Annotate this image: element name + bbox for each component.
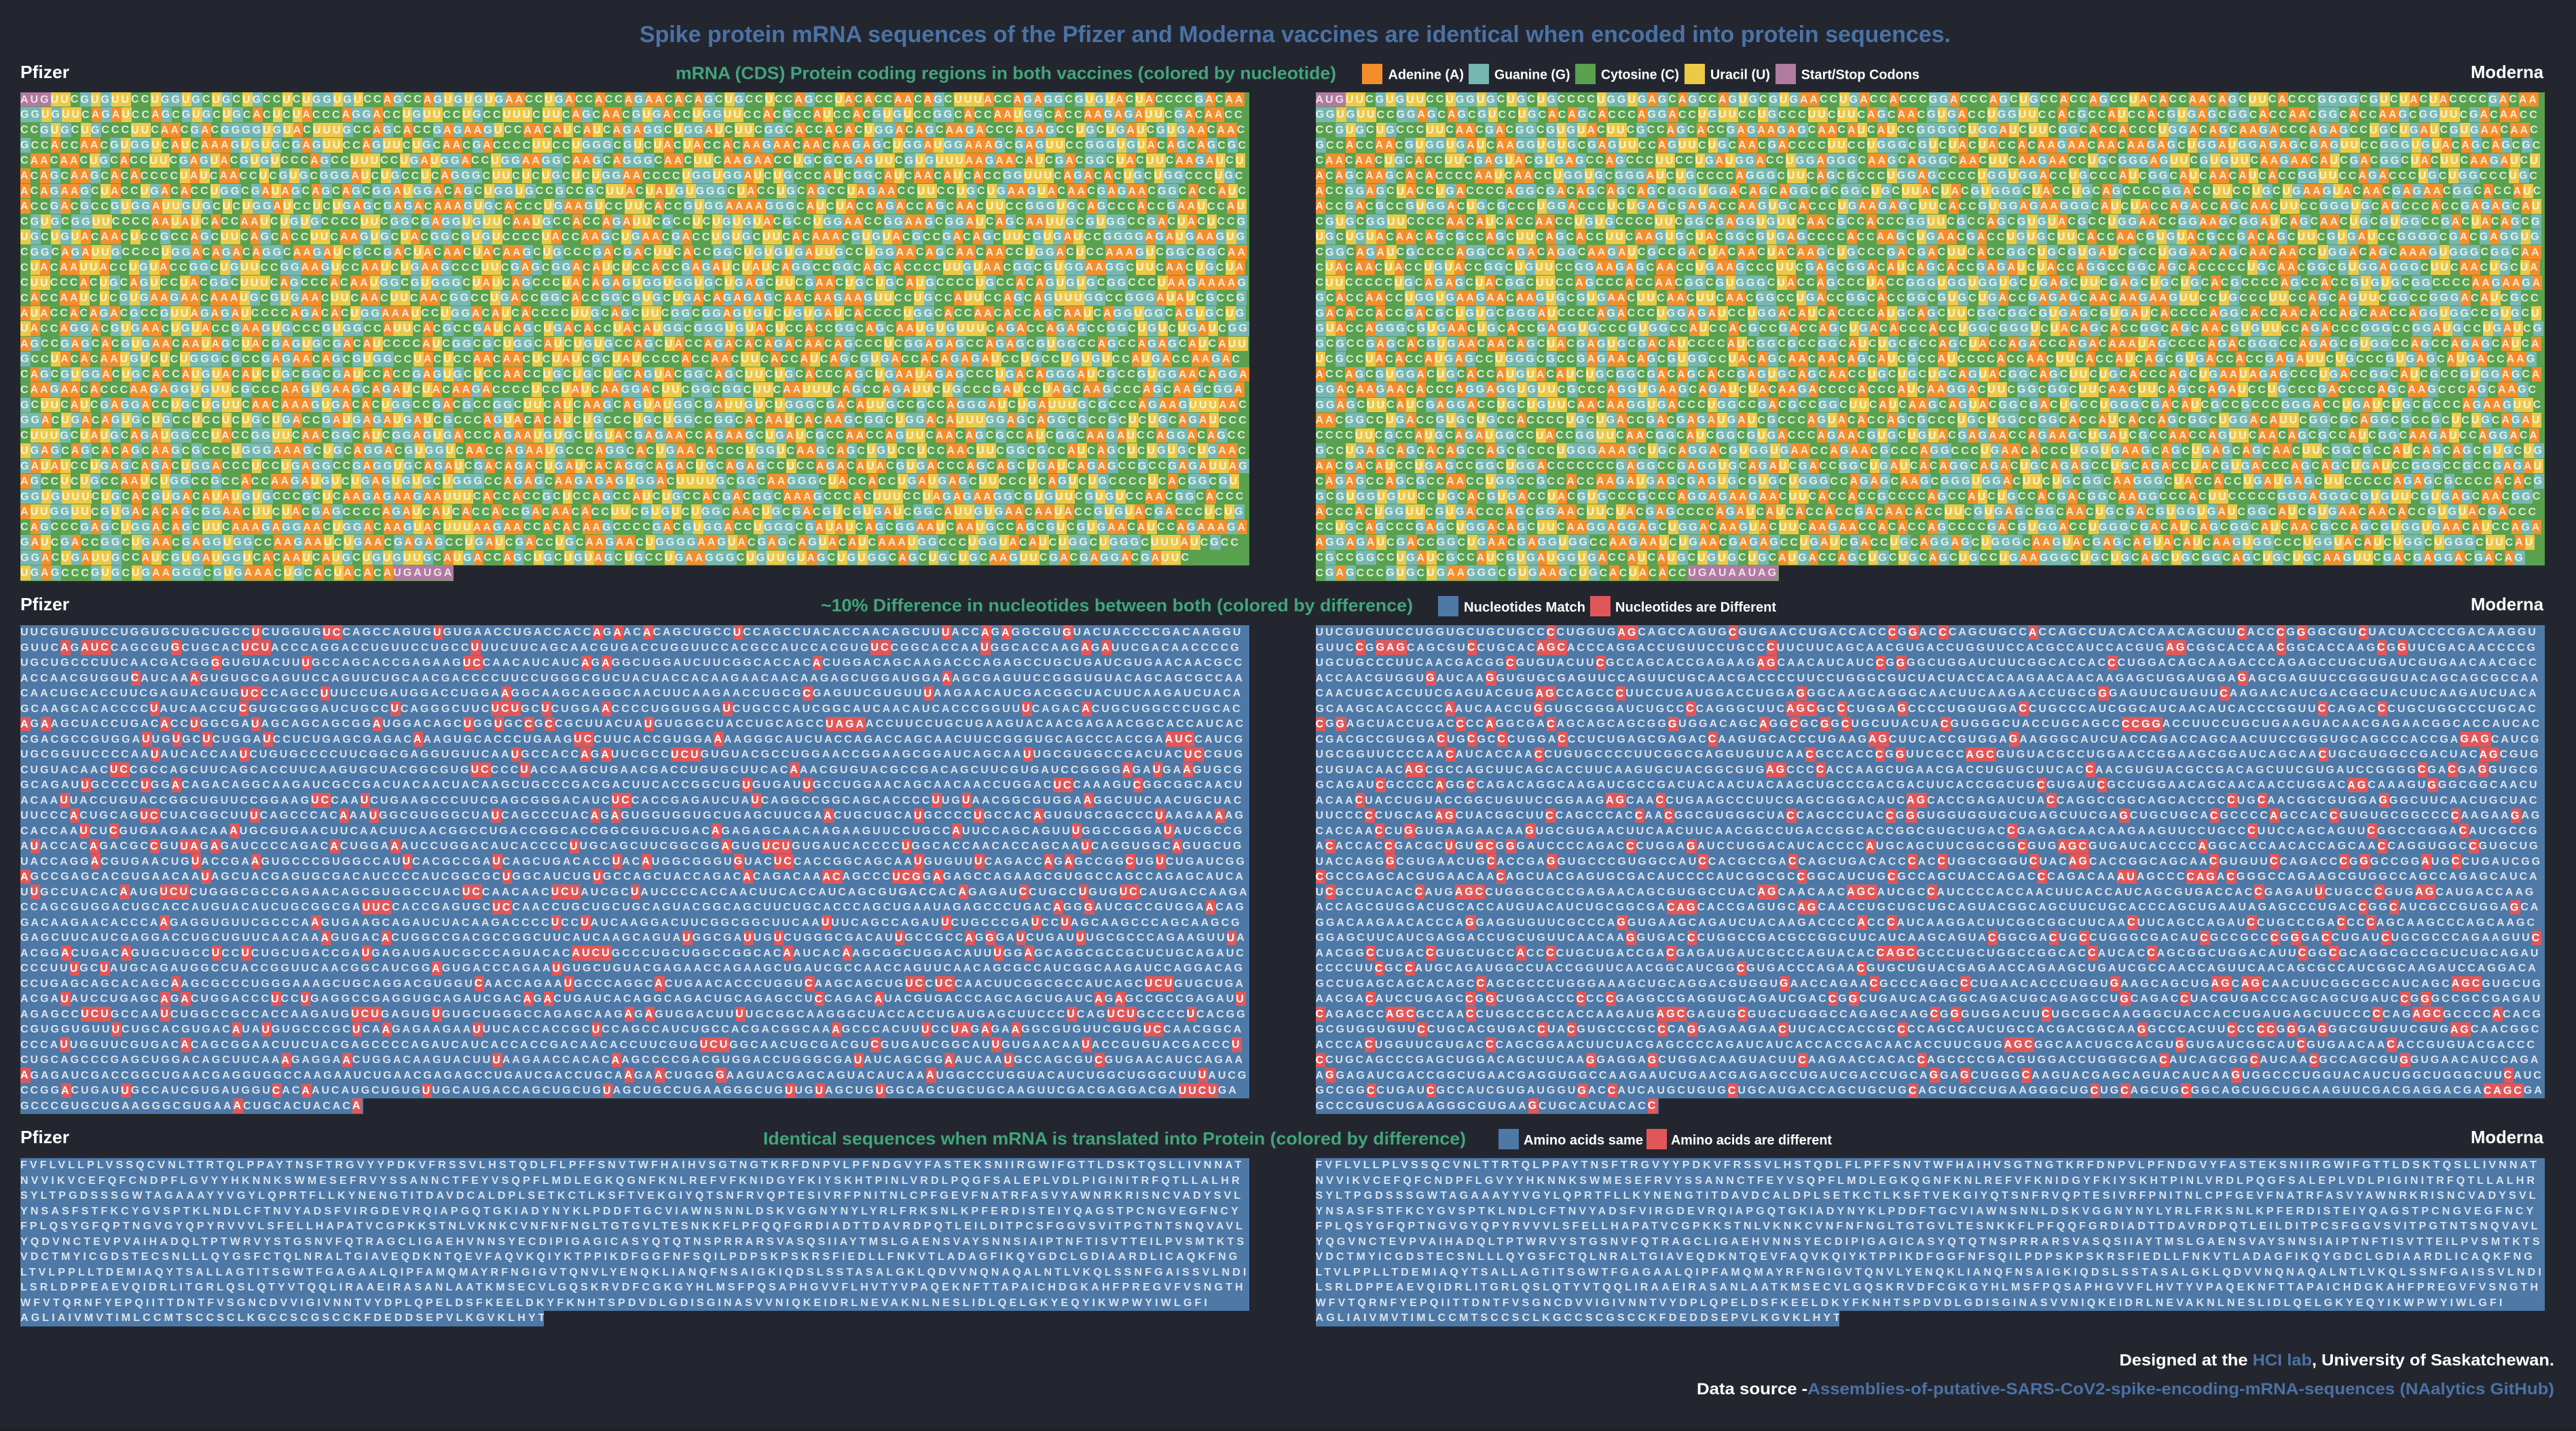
heading: nucleotide difference: ~10% Difference in nucleotides between both (colored by difference) xyxy=(821,595,1413,615)
legend: nucleotide match xyxy=(1438,596,1776,616)
panel: Pfizer protein sequence: FVFLVLLPLVSSQCVNLTTRTQLPPAYTNSFTRGVYYPDKVFRSSVLHSTQDLFLPFFSNVTWFHAIHVSGTNGTKRFDNPVLPFNDGVYFASTEKSNIIRGWIFGTTLDSKTQSLLIVNNATNVVIKVCEFQFCNDPFLGVYYHKNNKSWMESEFRVYSSANNCTFEYVSQPFLMDLEGKQGNFKNLREFVFKNIDGYFKIYSKHTPINLVRDLPQGFSALEPLVDLPIGINITRFQTLLALHRSYLTPGDSSSGWTAGAAAYYVGYLQPRTFLLKYNENGTITDAVDCALDPLSETKCTLKSFTVEKGIYQTSNFRVQPTESIVRFPNITNLCPFGEVFNATRFASVYAWNRKRISNCVADYSVLYNSASFSTFKCYGVSPTKLNDLCFTNVYADSFVIRGDEVRQIAPGQTGKIADYNYKLPDDFTGCVIAWNSNNLDSKVGGNYNYLYRLFRKSNLKPFERDISTEIYQAGSTPCNGVEGFNCYFPLQSYGFQPTNGVGYQPYRVVVLSFELLHAPATVCGPKKSTNLVKNKCVNFNFNGLTGTGVLTESNKKFLPFQQFGRDIADTTDAVRDPQTLEILDITPCSFGGVSVITPGTNTSNQVAVLYQDVNCTEVPVAIHADQLTPTWRVYSTGSNVFQTRAGCLIGAEHVNNSYECDIPIGAGICASYQTQTNSPRRARSVASQSIIAYTMSLGAENSVAYSNNSIAIPTNFTISVTTEILPVSMTKTSVDCTMYICGDSTECSNLLLQYGSFCTQLNRALTGIAVEQDKNTQEVFAQVKQIYKTPPIKDFGGFNFSQILPDPSKPSKRSFIEDLLFNKVTLADAGFIKQYGDCLGDIAARDLICAQKFNGLTVLPPLLTDEMIAQYTSALLAGTITSGWTFGAGAALQIPFAMQMAYRFNGIGVTQNVLYENQKLIANQFNSAIGKIQDSLSSTASALGKLQDVVNQNAQALNTLVKQLSSNFGAISSVLNDILSRLDPPEAEVQIDRLITGRLQSLQTYVTQQLIRAAEIRASANLAATKMSECVLGQSKRVDFCGKGYHLMSFPQSAPHGVVFLHVTYVPAQEKNFTTAPAICHDGKAHFPREGVFVSNGTHWFVTQRNFYEPQIITTDNTFVSGNCDVVIGIVNNTVYDPLQPELDSFKEELDKYFKNHTSPDVDLGDISGINASVVNIQKEIDRLNEVAKNLNESLIDLQELGKYEQYIKWPWYIWLGFI xyxy=(20,1159,1249,1309)
legend: nucleotides: Guanine (G) xyxy=(1494,68,1570,83)
label: Pfizer row 2: Pfizer xyxy=(20,594,69,614)
panel: Pfizer protein sequence: AGLIAIVMVTIMLCCMTSCCSCLKGCCSCGSCCKFDEDDSEPVLKGVKLHYT xyxy=(20,1312,548,1324)
panel: Moderna mRNA coloured by nucleotide: CGAGCCCGUGCUGAAGGGCGUGAAGCUGCACUACACCUGAUAAUAG xyxy=(1316,568,1778,578)
legend: nucleotides xyxy=(1362,64,1919,84)
label: Moderna row 3: Moderna xyxy=(2471,1127,2544,1147)
legend: nucleotides: Adenine (A) xyxy=(1388,68,1464,83)
legend: nucleotides: Start/Stop Codons xyxy=(1801,68,1919,83)
panel: Moderna mRNA coloured by nucleotide: AUGUUCGUGUUCCUGGUGCUGCUGCCCCUGGUGAGCAGCCAGUGCGUGAACCUGACCACCCGGACCCAGCUGCCACCAGCCUACACCAACAGCUUCACCCGGGGCGUCUACUACCCCGACAA GGUGUUCCGGAGCAGCGUCCUGCACAGCACCCAGGACCUGUUCCUGCCCUUCUUCAGCAACGUGACCUGGUUCCACGCCAUCCACGUGAGCGGCACCAACGGCACCAAGCGGUUCGACAACCCCGUGCUGCCCUUCAACGACGGCGUGUACUUCGCCAGCACCGAGAAGAGCAACAUCAUCCGGGGCUGGAUCUUCGGCACCACCCUGGACAGCAAGACCCAGAGCCUGCUGAUCGUGAACAAC GCCACCAACGUGGUGAUCAAGGUGUGCGAGUUCCAGUUCUGCAACGACCCCUUCCUGGGCGUCUACUACCACAAGAACAACAAGAGCUGGAUGGAGAGCGAGUUCCGGGUGUACAGCAGCGCCAACAACUGCACCUUCGAGUACGUGAGCCAGCCCUUCCUGAUGGACCUGGAGGGCAAGCAGGGCAACUUCAAGAACCUGCGGGAGUUCGUGUUCAAGAACAUCGACGGCUACUUCAAGAUCU ACAGCAAGCACACCCCAAUCAACCUGGUGCGGGAUCUGCCCCAGGGCUUCAGCGCCCUGGAGCCCCUGGUGGACCUGCCCAUCGGCAUCAACAUCACCGGUUCCAGACCCUGCUGGCCCUGC ACCGGAGCUACCUGACCCCAGGCGACAGCAGCAGCGGGUGGACAGCAGGCGCGGCUGCUUACUACGUGGGCUACCUGCAGCCCCGGACCUUCCUGCUGAAGUACAACGAGAACGGCACCAUC ACCGACGCCGUGGACUGCGCCCUGGACCCUCUGAGCGAGACCAAGUGCACCCUGAAGAGCUUCACCGUGGAGAAGGGCAUCUACCAGACCAGCAACUUCCGGGUGCAGCCCACCGAGAGCAU CGUGCGGUUCCCCAACAUCACCAACCUGUGCCCCUUCGGCGAGGUGUUCAACGCCACCCGGUUCGCCAGCGUGUACGCCUGGAACCGGAAGCGGAUCAGCAACUGCGUGGCCGACUACAGCG UGCUGUACAACAGCGCCAGCUUCAGCACCUUCAAGUGCUACGGCGUGAGCCCCACCAAGCUGAACGACCUGUGCUUCACCAACGUGUACGCCGACAGCUUCGUGAUCCGGGGCGACGAGGUG CGGCAGAUCGCCCCAGGCCAGACAGGCAAGAUCGCCGACUACAACUACAAGCUGCCCGACGACUUCACCGGCUGCGUGAUCGCCUGGAACAGCAACAACCUGGACAGCAAAGUGGGCGGCAA CUACAACUACCUGUACCGGCUGUUCCGGAAGAGCAACCUGAAGCCCUUCGAGCGGACAUCAGCACCGAGAUCUACCAGGCCGGCAGCACCCCCUGCAACGGCGUGGAGGGCUUCAACUGCUA CUUCCCCCUGCAGAGCUACGGCUUCCAGCCCACCAACGGCGUGGGCUACCAGCCCUACCGGGUGGUGGUGCUGAGCUUCGAGCUGCUGCACGCCCCAGCCACCGUGUGCGGCCCCAAGAAGA GCACCAACCUGGUGAAGAACAAGUGCGUGAACUUCAACUUCAACGGCCUGACCGGCACCGGCGUGCUGACCGAGAGCAACAAGAAGUUCCUGCCCUUCCAGCAGUUCGGCCGGGACAUCGCC GACACCACCGACGCUGUGCGGGAUCCCCAGACCCUGGAGAUCCUGGACAUCACCCCAUGCAGCUUCGGCGGCGUGAGCGUGAUCACCCCAGGCACCAACACCAGCAACCAGGUGGCCGUGCU GUACCAGGGCGUGAACUGCACCGAGGUGCCCGUGGCCAUCCACGCCGACCAGCUGACACCCACCUGGCGGGUCUACAGCACCGGCAGCAACGUGUUCCAGACCCGGGCCGGAUGCCUGAUCGGCGCCGAGCACGUGAACAACAGCUACGAGUGCGACAUCCCCAUCGGCGCCGGCAUCUGCGCCAGCUACCAGACCCAGACAAAUAGCCCCAGACGGGCCAGAGCGUGGCCAGCCAGAGCAUCA UCGCCUACACCAUGAGCCUGGGCGCCGAGAACAGCGUGGCCUACAGCAACAACAGCAUCGCCAUCCCCACCAACUUCACCAUCAGCGUGACCACCGAGAUUCUGCCCGUGAGCAUGACCAAG ACCAGCGUGGACUGCACCAUGUACAUCUGCGGCGACAGCACCGAGUGCAGCAACCUGCUGCUGCAGUACGGCAGCUUCUGCACCCAGCUGAAUAGAGCCCUGACCGGCAUCGCCGUGGAGCA GGACAAGAACACCCAGGAGGUGUUCGCCCAGGUGAAGCAGAUCUACAAGACCCCACCCAUCAAGGACUUCGGCGGCUUCAACUUCAGCCAGAUCCUGCCCGACCCCAGCAAGCCCAGCAAGC GGAGCUUCAUCGAGGACCUGCUGUUCAACAAGGUGACCCUGGCCGACGCCGGCUUCAUCAAGCAGUACGGCGACUGCCUGGGCGACAUCGCCGCCCGGGACCUGAUCUGCGCCCAGAAGUUC AACGGCCUGACCGUGCUGCCACCCCUGCUGACCGACGAGAUGAUCGCCCAGUACACCAGCGCCCUGCUGGCCGGCACCAUCACCAGCGGCUGGACAUUCGGCGCAGGCGCCGCUCUGCAGAU CCCCUUCGCCAUGCAGAUGGCCUACCGGUUCAACGGCAUCGGCGUGACCCAGAACGUGCUGUACGAGAACCAGAAGCUGAUCGCCAACCAGUUCAACAGCGCCAUCGGCAAGAUCCAGGACA GCCUGAGCAGCACAGCCAGCGCCCUGGGAAAGCUGCAGGACGUGGUGAACCAGAACGCCCAGGCCCUGAACACCCUGGUGAAGCAGCUGAGCAGCAACUUCGGCGCCAUCAGCAGCGUGCUG AACGACAUCCUGAGCCGGCUGGACCCCCCCGAGGCCGAGGUGCAGAUCGACCGGCUGAUCACAGGCAGACUGCAGAGCCUGCAGACCUACGUGACCCAGCAGCUGAUCCGGGCCGCCGAGAU CAGAGCCAGCGCCAACCUGGCCGCCACCAAGAUGAGCGAGUGCGUGCUGGGCCAGAGCAAGCGGGUGGACUUCUGCGGCAAGGGCUACCACCUGAUGAGCUUCCCCCAGAGCGCCCCACACGGCGUGGUGUUCCUGCACGUGACCUACGUGCCCGCCCAGGAGAAGAACUUCACCACCGCCCCAGCCAUCUGCCACGACGGCAAGGCCCACUUCCCCCGGGAGGGCGUGUUCGUGAGCAACGGC ACCCACUGGUUCGUGACCCAGCGGAACUUCUACGAGCCCCAGAUCAUCACCACCGACAACACCUUCGUGAGCGGCAACUGCGACGUGGUGAUCGGCAUCGUGAACAACACCGUGUACGACCCCCUGCAGCCCGAGCUGGACAGCUUCAAGGAGGAGCUGGACAAGUACUUCAAGAACCACACCAGCCCCGACGUGGACCUGGGCGACAUCAGCGGCAUCAACGCCAGCGUGGUGAACAUCCAGAAGGAGAUCGACCGGCUGAACGAGGUGGCCAAGAAUCUGAACGAGAGCCUGAUCGACCUGCAGGAGCUGGGCAAGUACGAGCAGUACAUCAAGUGGCCCUGGUACAUCUGGCUGGGCUUCAU CGCCGGCCUGAUCGCCAUCGUGAUGGUGACCAUCAUGCUGUGCUGCAUGACCAGCUGCUGCAGCUGCCUGAAGGGCUGCUGCAGCUGCGGCAGCUGCUGCAAGUUCGACGAGGACGACAG xyxy=(1316,94,2544,563)
legend: nucleotide match: Nucleotides are Different xyxy=(1615,600,1776,615)
label: Pfizer row 1: Pfizer xyxy=(20,62,69,82)
heading: protein translation: Identical sequences when mRNA is translated into Protein (colored by difference) xyxy=(763,1128,1466,1149)
panel: Pfizer mRNA coloured by nucleotide: AUGUUCGUGUUCCUGGUGCUGCUGCCUCUGGUGUCCAGCCAGUGUGUGAACCUGACCACCAGAACACAGCUGCCUCCAGCCUACACCAACAGCUUUACCAGAGGCGUGUACUACCCCGACAA GGUGUUCAGAUCCAGCGUGCUGCACUCUACCCAGGACCUGUUCCUGCCUUUCUUCAGCAACGUGACCUGGUUCCACGCCAUCCACGUGUCCGGCACCAAUGGCACCAAGAGAUUCGACAACCCCGUGCUGCCCUUCAACGACGGGGUGUACUUUGCCAGCACCGAGAAGUCCAACAUCAUCAGAGGCUGGAUCUUCGGCACCACACUGGACAGCAAGACCCAGAGCCUGCUGAUCGUGAACAAC GCCACCAACGUGGUCAUCAAAGUGUGCGAGUUCCAGUUCUGCAACGACCCCUUCCUGGGCGUCUACUACCACAAGAACAACAAGAGCUGGAUGGAAAGCGAGUUCCGGGUGUACAGCAGCGCCAACAACUGCACCUUCGAGUACGUGUCCCAGCCUUUCCUGAUGGACCUGGAAGGCAAGCAGGGCAACUUCAAGAACCUGCGCGAGUUCGUGUUUAAGAACAUCGACGGCUACUUCAAGAUCU ACAGCAAGCACACCCCUAUCAACCUCGUGCGGGAUCUGCCUCAGGGCUUCUCUGCUCUGGAACCCCUGGUGGAUCUGCCCAUCGGCAUCAACAUCACCGGUUUCAGACACUGCUGGCCCUGC ACAGAAGCUACCUGACACCUGGCGAUAGCAGCAGCGGAUGGACAGCUGGUGCCGCCGCUUACUAUGUGGGCUACCUGCAGCCUAGAACCUUCCUGCUGAAGUACAACGAGAACGGCACCAUC ACCGACGCCGUGGAUUGUGCUCUGGAUCCUCUGAGCGAGACAAAGUGCACCCUGAAGUCCUUCACCGUGGAAAAGGGCAUCUACCAGACCAGCAACUUCCGGGUGCAGCCCACCGAAUCCAU CGUGCGGUUCCCCAAUAUCACCAAUCUGUGCCCCUUCGGCGAGGUGUUCAAUGCCACCAGAUUCGCCUCUGUGUACGCCUGGAACCGGAAGCGGAUCAGCAAUUGCGUGGCCGACUACUCCG UGCUGUACAACUCCGCCAGCUUCAGCACCUUCAAGUGCUACGGCGUGUCCCCUACCAAGCUGAACGACCUGUGCUUCACAAACGUGUACGCCGACAGCUUCGUGAUCCGGGGAGAUGAAGUG CGGCAGAUUGCCCCUGGACAGACAGGCAAGAUCGCCGACUACAACUACAAGCUGCCCGACGACUUCACCGGCUGUGUGAUUGCCUGGAACAGCAACAACCUGGACUCCAAAGUCGGCGGCAA CUACAAUUACCUGUACCGGCUGUUCCGGAAGUCCAAUCUGAAGCCCUUCGAGCGGACAUCUCCACCGAGAUCUAUCAGGCCGGCAGCACCCCUUGUAACGGCGUGGAAGGCUUCAACUGCUA CUUCCCACUGCAGUCCUACGGCUUUCAGCCCACAAUGGCGUGGGCUAUCAGCCCUACAGAGUGGUGGUGCUGAGCUUCGAACUGCUGCAUGCCCCUGCCACAGUGUGCGGCCCUAAGAAAAG CACCAAUCUCGUGAAGAACAAAUGCGUGAACUUCAACUUCAACGGCCUGACCGGCACCGGCGUGCUGACAGAGAGCAACAAGAAGUUCCUGCCAUUCCAGCAGUUUGGCCGGGAUAUCGCCG AUACCACAGACGCCGUUAGAGAUCCCCAGACACUGGAAAUCCUGGACAUCACCCCUUGCAGCUUCGGCGGAGUGUCUGUGAUCACCCCUGGCACCAACACCAGCAAUCAGGUGGCAGUGCUG UACCAGGACGUGAACUGUACCGAAGUGCCCGUGGCCAUUCACGCCGAUCAGCUGACACCUACAUGGCGGGUGUACUCCACCGGCAGCAAUGUGUUUCAGACCAGAGCCGGCUGUCUGAUCGG AGCCGAGCACGUGAACAAUAGCUACGAGUGCGACAUCCCCAUCGGCGCUGGCAUCUGUGCCAGCUACCAGACACAGACAACAGCCCUCGGAGAGCCAGAGCGUGGCCAGCCAGAGCAUCAUU GCCUACACAAUGUCUCUGGGCGCCGAGAACAGCGUGGCCUACUCCAACAACUCUAUCGCUAUCCCCACCAACUUCACCAUCAGCGUGACCACAGAGAUCCUGCCUGUGUCCAUGACCAAGACCAGCGUGGACUGCACCAUGUACAUCUGCGGCGAUCCACCGAGUGCUCCAACCUGCUGCUGCAGUACGGCAGCUUCUGCACCCAGCUGAAUAGAGCCCUGACAGGGAUCGCCGUGGAACAGGA CAAGAACACCCAAGAGGUGUUCGCCCAAGUGAAGCAGAUCUACAAGACCCCUCCUAUCAAGGACUUCGGCGGCUUCAAUUUCAGCCAGAUUCUGCCCGAUCCUAGCAAGCCCAGCAAGCGGA GCUUCAUCGAGGACCUGCUGUUCAACAAAGUGACACUGGCCGACGCCGGCUUCAUCAAGCAGUAUGGCGAUUGUCUGGGCGACAUUGCCGCCAGGGAUCUGAUUUGCGCCCAGAAGUUUAAC GGACUGACAGUGCUGCCUCCUCUGCUGACCGAUGAGAUGAUCGCCCAGUACACAUCUGCCCUGCUGGCCGGCACAAUCACAAGCGGCUGGACAUUUGGAGCAGGCGCCGCUCUGCAGAUCCCCUUUGCUAUGCAGAUGGCCUACCGGUUCAACGGCAUCGGAGUGACCCAGAAUGUGCUGUACGAGAACCAGAAGCUGAUCGCCAACCAGUUCAACAGCGCCAUCGGCAAGAUCCAGGACAGCC UGAGCAGCACAGCAAGCGCCCUGGGAAAGCUGCAGGACGUGGUCAACCAGAAUGCCCAGGCACUGAACACCCUGGUCAAGCAGCUGUCCUCCAACUUCGGCGCCAUCAGCUCUGUGCUGAAC GAUAUCCUGAGCAGACUGGACCCUCCUGAGGCCGAGGUGCAGAUCGACAGACUGAUCACAGGCAGACUGCAGAGCCUCCAGACAUACGUGACCCAGCAGCUGAUCAGAGCCGCCGAGAUUAG AGCCUCUGCCAAUCUGGCCGCCACCAAGAUGUCUGAGUGUGCUGGGCCAGAGCAAGAGAGUGGACUUUUGCGGCAAGGGCUACCACCUGAUGAGCUUCCCUCAGUCUGCCCCUCACGGCGU GGUGUUUCUGCACGUGACAUAUGUGCCCGCUCAAGAGAAGAAUUUCACCACCGCUCCAGCCAUCUGCCACGACGGCAAAGCCCACUUUCCUAGAGAAGGCGUGUUCGUGUCCAACGGCACCC AUUGGUUCGUGACACAGCGGAACUUCUACGAGCCCCAGAUCAUCACCACCGACAACACCUUCGUGUCUGGCAACUGCGACGUCGUGAUCGGCAUUGUGAACAAUACCGUGUACGACCCUCUG CAGCCCGAGCUGGACAGCUUCAAAGAGGAACUGGACAAGUACUUUAAGAACCACACAAGCCCCGACGUGGACCUGGGCGAUAUCAGCGGAAUCAAUGCCAGCGUCGUGAACAUCCAGAAAGA GAUCGACCGGCUGAACGAGGUGGCCAAGAAUCUGAACGAGAGCCUGAUCGACCUGCAAGAACUGGGGAAGUACGAGCAGUACAUCAAAUGGCCCUGGUACAUCUGGCUGGGCUUUAUCGCC GGACUGAUUGCCAUCGUGAUGGUCACAAUCAUGCUGUGUUGCAUGACCAGCUGCUGUAGCUGCCUGAAGGGCUGUUGUAGCUGUGGCAGCUGCUGCAAGUUCGACGAGGACGAUUC xyxy=(20,94,1249,563)
legend: nucleotides: Uracil (U) xyxy=(1710,68,1770,83)
legend: amino acids: Amino acids are different xyxy=(1671,1133,1832,1148)
panel: Moderna protein sequence: AGLIAIVMVTIMLCCMTSCCSCLKGCCSCGSCCKFDEDDSEPVLKGVKLHYT xyxy=(1316,1312,1843,1324)
legend: amino acids xyxy=(1498,1129,1832,1149)
legend: amino acids: Amino acids same xyxy=(1524,1133,1643,1148)
label: Pfizer row 3: Pfizer xyxy=(20,1127,69,1147)
title: Spike protein mRNA sequences of the Pfizer and Moderna vaccines are identical when encoded into protein sequences. xyxy=(640,22,1951,48)
panel: Moderna nucleotide differences: GCCCGUGCUGAAGGGCGUGAAGCUGCACUACACC xyxy=(1316,1100,1657,1112)
footer: data source: Data source - Assemblies-of-putative-SARS-CoV2-spike-encoding-mRNA-sequences (NAalytics GitHub) xyxy=(1697,1380,2554,1398)
panel: Pfizer mRNA coloured by nucleotide: UGAGCCCGUGCUGAAGGGCGUGAAACUGCACUACACAUGAUGA xyxy=(20,568,454,578)
label: Moderna row 2: Moderna xyxy=(2471,594,2544,614)
heading: mRNA coding regions: mRNA (CDS) Protein coding regions in both vaccines (colored by nucleotide) xyxy=(676,62,1336,83)
label: Moderna row 1: Moderna xyxy=(2471,62,2544,82)
legend: nucleotides: Cytosine (C) xyxy=(1601,68,1679,83)
panel: Moderna nucleotide differences: UUCGUGUUCCUGGUGCUGCUGCCCCUGGUGAGCAGCCAGUGCGUGAACCUGACCACCCGGACCCAGCUGCCACCAGCCUACACCAACAGCUUCACCCGGGGCGUCUACUACCCCGACAAGGUGUUCCGGAGCAGCGUCCUGCACAGCACCCAGGACCUGUUCCUGCCCUUCUUCAGCAACGUGACCUGGUUCCACGCCAUCCACGUGAGCGGCACCAACGGCACCAAGCGGUUCGACAACCCCGUGCUGCCCUUCAACGACGGCGUGUACUUCGCCAGCACCGAGAAGAGCAACAUCAUCCGGGGCUGGAUCUUCGGCACCACCCUGGACAGCAAGACCCAGAGCCUGCUGAUCGUGAACAACGCCACCAACGUGGUGAUCAAGGUGUGCGAGUUCCAGUUCUGCAACGACCCCUUCCUGGGCGUCUACUACCACAAGAACAACAAGAGCUGGAUGGAGAGCGAGUUCCGGGUGUACAGCAGCGCCAACAACUGCACCUUCGAGUACGUGAGCCAGCCCUUCCUGAUGGACCUGGAGGGCAAGCAGGGCAACUUCAAGAACCUGCGGGAGUUCGUGUUCAAGAACAUCGACGGCUACUUCAAGAUCUACAGCAAGCACACCCCAAUCAACCUGGUGCGGGAUCUGCCCCAGGGCUUCAGCGCCCUGGAGCCCCUGGUGGACCUGCCCAUCGGCAUCAACAUCACCCGGUUCCAGACCCUGCUGGCCCUGCAC CGGAGCUACCUGACCCCAGGCGACAGCAGCAGCGGGUGGACAGCAGGCGCGGCUGCUUACUACGUGGGCUACCUGCAGCCCCGGACCUUCCUGCUGAAGUACAACGAGAACGGCACCAUCACCGACGCCGUGGACUGCGCCCUGGACCCUCUGAGCGAGACCAAGUGCACCCUGAAGAGCUUCACCGUGGAGAAGGGCAUCUACCAGACCAGCAACUUCCGGGUGCAGCCCACCGAGAGCAUCGUGCGGUUCCCCAACAUCACCAACCUGUGCCCCUUCGGCGAGGUGUUCAACGCCACCCGGUUCGCCAGCGUGUACGCCUGGAACCGGAAGCGGAUCAGCAACUGCGUGGCCGACUACAGCGUGCUGUACAACAGCGCCAGCUUCAGCACCUUCAAGUGCUACGGCGUGAGCCCCACCAAGCUGAACGACCUGUGCUUCACCAACGUGUACGCCGACAGCUUCGUGAUCCGGGGCGACGAGGUGCGGCAGAUCGCCCCAGGCCAGACAGGCAAGAUCGCCGACUACAACUACAAGCUGCCCGACGACUUCACCGGCUGCGUGAUCGCCUGGAACAGCAACAACCUGGACAGCAAAGUGGGCGGCAACUACAACUACCUGUACCGGCUGUUCCGGAAGAGCAACCUGAAGCCCUUCGAGCGGGACAUCAGCACCGAGAUCUACCAGGCCGGCAGCACCCCCUGCAACGGCGUGGAGGGCUUCAACUGCUACUUCCCCCUGCAGAGCUACGGCUUCCAGCCCACCAACGGCGUGGGCUACCAGCCCUACCGGGUGGUGGUGCUGAGCUUCGAGCUGCUGCACGCCCCAGCCACCGUGUGCGGCCCCAAGAAGAGCACCAACCUGGUGAAGAACAAGUGCGUGAACUUCAACUUCAACGGCCUGACCGGCACCGGCGUGCUGACCGAGAGCAACAAGAAGUUCCUGCCCUUCCAGCAGUUCGGCCGGGACAUCGCCGACACCACCGACGCUGUGCGGGAUCCCCAGACCCUGGAGAUCCUGGACAUCACCCCAUGCAGCUUCGGCGGCGUGAGCGUGAUCACCCCAGGCACCAACACCAGCAACCAGGUGGCCGUGCUGUACCAGGGCGUGAACUGCACCGAGGUGCCCGUGGCCAUCCACGCCGACCAGCUGACACCCACCUGGCGGGUCUACAGCACCGGCAGCAACGUGUUCCAGACCCGGGCCGGAUGCCUGAUCGG CGCCGAGCACGUGAACAACAGCUACGAGUGCGACAUCCCCAUCGGCGCCGGCAUCUGCGCCAGCUACCAGACCCAGACAAAUAGCCCCAGACGGGCCAGAAGCGUGGCCAGCCAGAGCAUCAUCGCCUACACCAUGAGCCUGGGCGCCGAGAACAGCGUGGCCUACAGCAACAACAGCAUCGCCAUCCCCACCAACUUCACCAUCAGCGUGACCACCGAGAUUCUGCCCGUGAGCAUGACCAAGACCAGCGUGGACUGCACCAUGUACAUCUGCGGCGACAGCACCGAGUGCAGCAACCUGCUGCUGCAGUACGGCAGCUUCUGCACCCAGCUGAAUAGAGCCCUGACCGGCAUCGCCGUGGAGCAGGACAAGAACACCCAGGAGGUGUUCGCCCAGGUGAAGCAGAUCUACAAGACCCCACCCAUCAAGGACUUCGGCGGCUUCAACUUCAGCCAGAUCCUGCCCGACCCCAGCAAGCCCAGCAAGCGGAGCUUCAUCGAGGACCUGCUGUUCAACAAGGUGACCCUGGCCGACGCCGGCUUCAUCAAGCAGUACGGCGACUGCCUGGGCGACAUCGCCGCCCGGGACCUGAUCUGCGCCCAGAAGUUC AACGGCCUGACCGUGCUGCCACCCCUGCUGACCGACGAGAUGAUCGCCCAGUACACCAGCGCCCUGCUGGCCGGCACCAUCACCAGCGGCUGGACAUUCGGCGCAGGCGCCGCUCUGCAGAUCCCCUUCGCCAUGCAGAUGGCCUACCGGUUCAACGGCAUCGGCGUGACCCAGAACGUGCUGUACGAGAACCAGAAGCUGAUCGCCAACCAGUUCAACAGCGCCAUCGGCAAGAUCCAGGACAGCCUGAGCAGCACAGCCAGCGCCCUGGGAAAGCUGCAGGACGUGGUGAACCAGAACGCCCAGGCCCUGAACACCCUGGUGAAGCAGCUGAGCAGCAACUUCGGCGCCAUCAGCAGCGUGCUGAACGACAUCCUGAGCCGGCUGGACCCCCCCGAGGCCGAGGUGCAGAUCGACCGGCUGAUCACAGGCAGACUGCAGAGCCUGCAGACCUACGUGACCCAGCAGCUGAUCCGGGCCGCCGAGAU CAGAGCCAGCGCCAACCUGGCCGCCACCAAGAUGAGCGAGUGCGUGCUGGGCCAGAGCAAGCGGGUGGACUUCUGCGGCAAGGGCUACCACCUGAUGAGCUUCCCCCAGAGCGCCCCACACGGCGUGGUGUUCCUGCACGUGACCUACGUGCCCGCCCAGGAGAAGAACUUCACCACCGCCCCAGCCAUCUGCCACGACGGCAAGGCCCACUUCCCCCGGGAGGGCGUGUUCGUGAGCAACGGCACCCACUGGUUCGUGACCCAGCGGAACUUCUACGAGCCCCAGAUCAUCACCACCGACAACACCUUCGUGAGCGGCAACUGCGACGUGGUGAUCGGCAUCGUGAACAACACCGUGUACGACCC CCUGCAGCCCGAGCUGGACAGCUUCAAGGAGGAGCUGGACAAGUACUUCAAGAACCACACCAGCCCCGACGUGGACCUGGGCGACAUCAGCGGCAUCAACGCCAGCGUGGUGAACAUCCAGAAGGAGAUCGACCGGCUGAACGAGGUGGCCAAGAAUCUGAACGAGAGCCUGAUCGACCUGCAGGAGCUGGGCAAGUACGAGCAGUACAUCAAGUGGCCCUGGUACAUCUGGCUGGGCUUCAUCGCCGGCCUGAUCGCCAUCGUGAUGGUGACCAUCAUGCUGUGCUGCAUGACCAGCUGCUGCAGCUGCCUGAAGGGCUGCUGCAGCUGCGGCAGCUGCUGCAAGUUCGACGAGGACGACAGCGA xyxy=(1316,627,2544,1096)
footer: credit: Designed at the HCI lab, University of Saskatchewan. xyxy=(2120,1352,2554,1370)
panel: Pfizer nucleotide differences: GCCCGUGCUGAAGGGCGUGAAACUGCACUACACA xyxy=(20,1100,362,1112)
panel: Moderna protein sequence: FVFLVLLPLVSSQCVNLTTRTQLPPAYTNSFTRGVYYPDKVFRSSVLHSTQDLFLPFFSNVTWFHAIHVSGTNGTKRFDNPVLPFNDGVYFASTEKSNIIRGWIFGTTLDSKTQSLLIVNNATNVVIKVCEFQFCNDPFLGVYYHKNNKSWMESEFRVYSSANNCTFEYVSQPFLMDLEGKQGNFKNLREFVFKNIDGYFKIYSKHTPINLVRDLPQGFSALEPLVDLPIGINITRFQTLLALHRSYLTPGDSSSGWTAGAAAYYVGYLQPRTFLLKYNENGTITDAVDCALDPLSETKCTLKSFTVEKGIYQTSNFRVQPTESIVRFPNITNLCPFGEVFNATRFASVYAWNRKRISNCVADYSVLYNSASFSTFKCYGVSPTKLNDLCFTNVYADSFVIRGDEVRQIAPGQTGKIADYNYKLPDDFTGCVIAWNSNNLDSKVGGNYNYLYRLFRKSNLKPFERDISTEIYQAGSTPCNGVEGFNCYFPLQSYGFQPTNGVGYQPYRVVVLSFELLHAPATVCGPKKSTNLVKNKCVNFNFNGLTGTGVLTESNKKFLPFQQFGRDIADTTDAVRDPQTLEILDITPCSFGGVSVITPGTNTSNQVAVLYQGVNCTEVPVAIHADQLTPTWRVYSTGSNVFQTRAGCLIGAEHVNNSYECDIPIGAGICASYQTQTNSPRRARSVASQSIIAYTMSLGAENSVAYSNNSIAIPTNFTISVTTEILPVSMTKTSVDCTMYICGDSTECSNLLLQYGSFCTQLNRALTGIAVEQDKNTQEVFAQVKQIYKTPPIKDFGGFNFSQILPDPSKPSKRSFIEDLLFNKVTLADAGFIKQYGDCLGDIAARDLICAQKFNGLTVLPPLLTDEMIAQYTSALLAGTITSGWTFGAGAALQIPFAMQMAYRFNGIGVTQNVLYENQKLIANQFNSAIGKIQDSLSSTASALGKLQDVVNQNAQALNTLVKQLSSNFGAISSVLNDILSRLDPPEAEVQIDRLITGRLQSLQTYVTQQLIRAAEIRASANLAATKMSECVLGQSKRVDFCGKGYHLMSFPQSAPHGVVFLHVTYVPAQEKNFTTAPAICHDGKAHFPREGVFVSNGTHWFVTQRNFYEPQIITTDNTFVSGNCDVVIGIVNNTVYDPLQPELDSFKEELDKYFKNHTSPDVDLGDISGINASVVNIQKEIDRLNEVAKNLNESLIDLQELGKYEQYIKWPWYIWLGFI xyxy=(1316,1159,2544,1309)
legend: nucleotide match: Nucleotides Match xyxy=(1464,600,1585,615)
panel: Pfizer nucleotide differences: UUCGUGUUCCUGGUGCUGCUGCCUCUGGUGUCCAGCCAGUGUGUGAACCUGACCACCAGAACACAGCUGCCUCCAGCCUACACCAACAGCUUUACCAGAGGCGUGUACUACCCCGACAAGGUGUUCAGAUCCAGCGUGCUGCACUCUACCCAGGACCUGUUCCUGCCUUUCUUCAGCAACGUGACCUGGUUCCACGCCAUCCACGUGUCCGGCACCAAUGGCACCAAGAGAUUCGACAACCCCGUGCUGCCCUUCAACGACGGGGUGUACUUUGCCAGCACCGAGAAGUCCAACAUCAUCAGAGGCUGGAUCUUCGGCACCACACUGGACAGCAAGACCCAGAGCCUGCUGAUCGUGAACAACGCCACCAACGUGGUCAUCAAAGUGUGCGAGUUCCAGUUCUGCAACGACCCCUUCCUGGGCGUCUACUACCACAAGAACAACAAGAGCUGGAUGGAAAGCGAGUUCCGGGUGUACAGCAGCGCCAACAACUGCACCUUCGAGUACGUGUCCCAGCCUUUCCUGAUGGACCUGGAAGGCAAGCAGGGCAACUUCAAGAACCUGCGCGAGUUCGUGUUUAAGAACAUCGACGGCUACUUCAAGAUCUACAGCAAGCACACCCCUAUCAACCUCGUGCGGGAUCUGCCUCAGGGCUUCUCUGCUCUGGAACCCCUGGUGGAUCUGCCCAUCGGCAUCAACAUCACCCGGUUUCAGACACUGCUGGCCCUGCAC AGAAGCUACCUGACACCUGGCGAUAGCAGCAGCGGAUGGACAGCUGGUGCCGCCGCUUACUAUGUGGGCUACCUGCAGCCUAGAACCUUCCUGCUGAAGUACAACGAGAACGGCACCAUCACCGACGCCGUGGAUUGUGCUCUGGAUCCUCUGAGCGAGACAAAGUGCACCCUGAAGUCCUUCACCGUGGAAAAGGGCAUCUACCAGACCAGCAACUUCCGGGUGCAGCCCACCGAAUCCAUCGUGCGGUUCCCCAAUAUCACCAAUCUGUGCCCCUUCGGCGAGGUGUUCAAUGCCACCAGAUUCGCCUCUGUGUACGCCUGGAACCGGAAGCGGAUCAGCAAUUGCGUGGCCGACUACUCCGUGCUGUACAACUCCGCCAGCUUCAGCACCUUCAAGUGCUACGGCGUGUCCCCUACCAAGCUGAACGACCUGUGCUUCACAAACGUGUACGCCGACAGCUUCGUGAUCCGGGGAGAUGAAGUGCGGCAGAUUGCCCCUGGACAGACAGGCAAGAUCGCCGACUACAACUACAAGCUGCCCGACGACUUCACCGGCUGUGUGAUUGCCUGGAACAGCAACAACCUGGACUCCAAAGUCGGCGGCAACUACAAUUACCUGUACCGGCUGUUCCGGAAGUCCAAUCUGAAGCCCUUCGAGCGGGACAUCUCCACCGAGAUCUAUCAGGCCGGCAGCACCCCUUGUAACGGCGUGGAAGGCUUCAACUGCUACUUCCCACUGCAGUCCUACGGCUUUCAGCCCACAAAUGGCGUGGGCUAUCAGCCCUACAGAGUGGUGGUGCUGAGCUUCGAACUGCUGCAUGCCCCUGCCACAGUGUGCGGCCCUAAGAAAAGCACCAAUCUCGUGAAGAACAAAUGCGUGAACUUCAACUUCAACGGCCUGACCGGCACCGGCGUGCUGACAGAGAGCAACAAGAAGUUCCUGCCAUUCCAGCAGUUUGGCCGGGAUAUCGCCGAUACCACAGACGCCGUUAGAGAUCCCCAGACACUGGAAAUCCUGGACAUCACCCCUUGCAGCUUCGGCGGAGUGUCUGUGAUCACCCCUGGCACCAACACCAGCAAUCAGGUGGCAGUGCUGUACCAGGACGUGAACUGUACCGAAGUGCCCGUGGCCAUUCACGCCGAUCAGCUGACACCUACAUGGCGGGUGUACUCCACCGGCAGCAAUGUGUUUCAGACCAGAGCCGGCUGUCUGAUCGG AGCCGAGCACGUGAACAAUAGCUACGAGUGCGACAUCCCCAUCGGCGCUGGCAUCUGUGCCAGCUACCAGACACAGACAAACAGCCCUCGGAGAGCCAGAAGCGUGGCCAGCCAGAGCAUCAUUGCCUACACAAUGUCUCUGGGCGCCGAGAACAGCGUGGCCUACUCCAACAACUCUAUCGCUAUCCCCACCAACUUCACCAUCAGCGUGACCACAGAGAUCCUGCCUGUGUCCAUGACCAAGACCAGCGUGGACUGCACCAUGUACAUCUGCGGCGAUUCCACCGAGUGCUCCAACCUGCUGCUGCAGUACGGCAGCUUCUGCACCCAGCUGAAUAGAGCCCUGACAGGGAUCGCCGUGGAACAGGACAAGAACACCCAAGAGGUGUUCGCCCAAGUGAAGCAGAUCUACAAGACCCCUCCUAUCAAGGACUUCGGCGGCUUCAAUUUCAGCCAGAUUCUGCCCGAUCCUAGCAAGCCCAGCAAGCGGAGCUUCAUCGAGGACCUGCUGUUCAACAAAGUGACACUGGCCGACGCCGGCUUCAUCAAGCAGUAUGGCGAUUGUCUGGGCGACAUUGCCGCCAGGGAUCUGAUUUGCGCCCAGAAGUUUAACGGACUGACAGUGCUGCCUCCUCUGCUGACCGAUGAGAUGAUCGCCCAGUACACAUCUGCCCUGCUGGCCGGCACAAUCACAAGCGGCUGGACAUUUGGAGCAGGCGCCGCUCUGCAGAUCCCCUUUGCUAUGCAGAUGGCCUACCGGUUCAACGGCAUCGGAGUGACCCAGAAUGUGCUGUACGAGAACCAGAAGCUGAUCGCCAACCAGUUCAACAGCGCCAUCGGCAAGAUCCAGGACAGCCUGAGCAGCACAGCAAGCGCCCUGGGAAAGCUGCAGGACGUGGUCAACCAGAAUGCCCAGGCACUGAACACCCUGGUCAAGCAGCUGUCCUCCAACUUCGGCGCCAUCAGCUCUGUGCUGAACGAUAUCCUGAGCAGACUGGACCCUCCUGAGGCCGAGGUGCAGAUCGACAGACUGAUCACAGGCAGACUGCAGAGCCUCCAGACAUACGUGACCCAGCAGCUGAUCAGAGCCGCCGAGAUU AGAGCCUCUGCCAAUCUGGCCGCCACCAAGAUGUCUGAGUGUGUGCUGGGCCAGAGCAAGAGAGUGGACUUUUGCGGCAAGGGCUACCACCUGAUGAGCUUCCCUCAGUCUGCCCCUCACGGCGUGGUGUUUCUGCACGUGACAUAUGUGCCCGCUCAAGAGAAGAAUUUCACCACCGCUCCAGCCAUCUGCCACGACGGCAAAGCCCACUUUCCUAGAGAAGGCGUGUUCGUGUCCAACGGCACCCAUUGGUUCGUGACACAGCGGAACUUCUACGAGCCCCAGAUCAUCACCACCGACAACACCUUCGUGUCUGGCAACUGCGACGUCGUGAUCGGCAUUGUGAACAAUACCGUGUACGACCCU CUGCAGCCCGAGCUGGACAGCUUCAAAGAGGAACUGGACAAGUACUUUAAGAACCACACAAGCCCCGACGUGGACCUGGGCGAUAUCAGCGGAAUCAAUGCCAGCGUCGUGAACAUCCAGAA AGAGAUCGACCGGCUGAACGAGGUGGCCAAGAAUCUGAACGAGAGCCUGAUCGACCUGCAAGAACUGGGGAAGUACGAGCAGUACAUCAAAUGGCCCUGGUACAUCUGGCUGGGCUUUAUCGCCGGACUGAUUGCCAUCGUGAUGGUCACAAUCAUGCUGUGUUGCAUGACCAGCUGCUGUAGCUGCCUGAAGGGCUGUUGUAGCUGUGGCAGCUGCUGCAAGUUCGACGAGGACGAUUCUGA xyxy=(20,627,1249,1096)
